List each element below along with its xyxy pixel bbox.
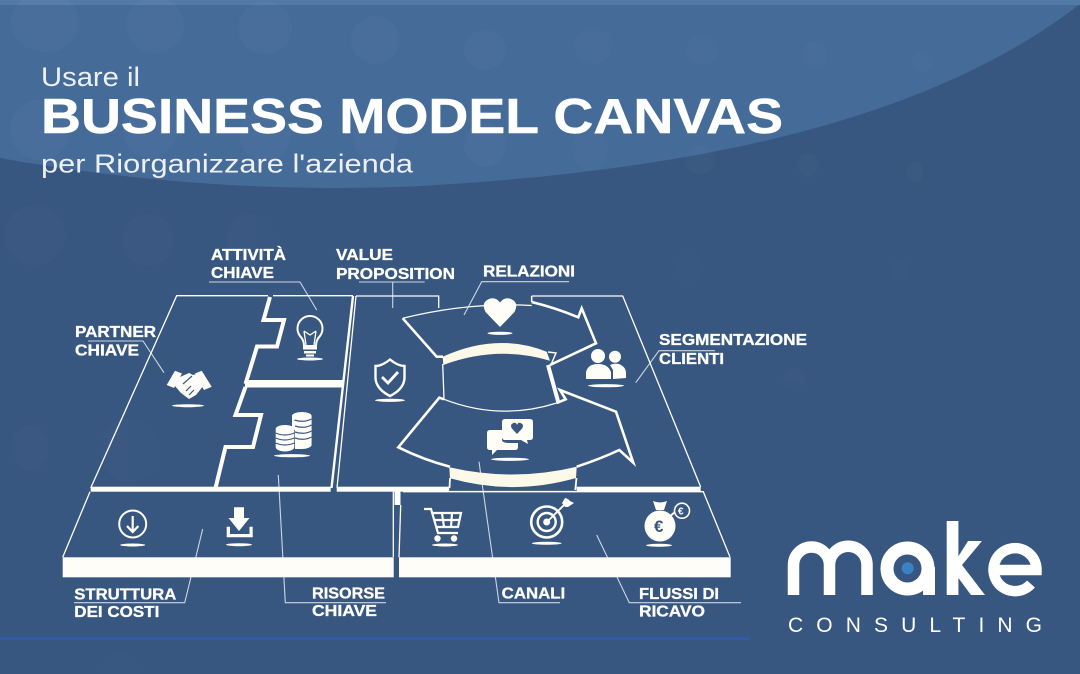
icon: shield [375, 360, 405, 402]
icon: handshake [167, 371, 212, 407]
panel: partner and key activities frames [91, 296, 356, 492]
icon: money bag: € [678, 506, 684, 518]
title: Business Model Canvas: BUSINESS MODEL CANVAS [41, 90, 783, 144]
label: attività chiave [211, 247, 286, 282]
panel: central block [443, 364, 558, 411]
leader lines [74, 282, 741, 603]
label: canali: CANALI [502, 585, 565, 602]
icon: money bag [644, 501, 690, 547]
arrow: canali [398, 390, 633, 490]
icon: target [531, 498, 574, 545]
panel: revenue streams [394, 491, 731, 577]
label: flussi di ricavo: FLUSSI DI [639, 586, 719, 603]
icon: light bulb [297, 316, 323, 360]
icon: circled down arrow [119, 510, 146, 546]
label: risorse chiave [312, 585, 385, 620]
label: value proposition: PROPOSITION [336, 266, 455, 283]
arrow: relazioni [403, 302, 596, 365]
label: segmentazione clienti: SEGMENTAZIONE [659, 332, 807, 349]
label: relazioni: RELAZIONI [483, 264, 575, 281]
icon: heart [484, 298, 516, 335]
label: segmentazione clienti [659, 332, 807, 368]
label: flussi di ricavo: RICAVO [639, 604, 705, 621]
panel: customer segments frame [450, 296, 701, 492]
label: risorse chiave: RISORSE [312, 585, 385, 602]
label: partner chiave: CHIAVE [75, 343, 139, 360]
icon: chat bubbles [487, 419, 533, 461]
panel: value proposition frame [337, 296, 449, 492]
logo: make consulting: CONSULTING [788, 614, 1042, 637]
label: segmentazione clienti: CLIENTI [659, 351, 724, 368]
label: struttura dei costi: STRUTTURA [74, 586, 176, 603]
title: Usare il: Usare il [41, 62, 140, 92]
subtitle: per Riorganizzare l'azienda [41, 148, 414, 178]
bottom blue rule [0, 637, 749, 640]
icon: shopping cart [424, 509, 461, 546]
label: risorse chiave: CHIAVE [312, 603, 377, 620]
icon: download [226, 507, 253, 546]
icon: coins [274, 412, 312, 457]
label: partner chiave [75, 324, 156, 360]
label: partner chiave: PARTNER [75, 324, 156, 341]
label: struttura dei costi: DEI COSTI [74, 604, 159, 621]
label: flussi di ricavo [639, 586, 719, 621]
label: value proposition [336, 247, 455, 283]
label: attività chiave: CHIAVE [211, 265, 274, 282]
label: struttura dei costi [74, 586, 176, 621]
label: attività chiave: ATTIVITÀ [211, 247, 286, 264]
label: value proposition: VALUE [336, 247, 393, 264]
panel: cost structure [63, 492, 394, 577]
icon: money bag: € [654, 517, 664, 536]
logo: make consulting [788, 521, 1042, 637]
icon: people [586, 349, 626, 387]
